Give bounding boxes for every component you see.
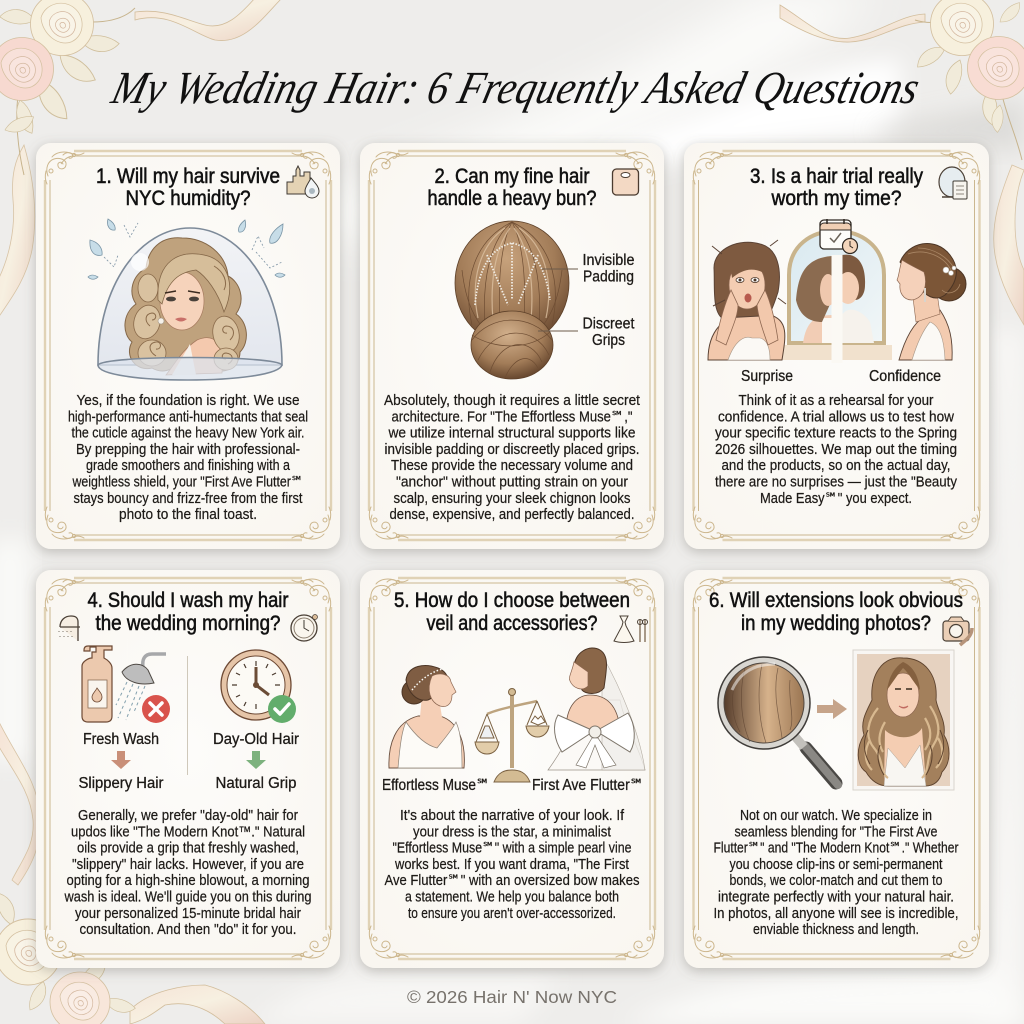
flow: fresh wash to slippery hair: Slippery Hair (78, 775, 164, 792)
divider (186, 656, 188, 775)
card 1 panel (36, 143, 340, 549)
illustration: first ave flutter (548, 648, 645, 770)
bun labels: Padding (583, 268, 634, 286)
card 3 answer text: confidence. A trial allows us to test how (718, 409, 954, 425)
card 2 answer text: "anchor" without putting strain on your (396, 474, 628, 490)
flow: fresh wash to slippery hair (78, 731, 164, 792)
card 2 heading: handle a heavy bun? (428, 187, 596, 210)
card 3 heading: 3. Is a hair trial really (750, 165, 923, 188)
card 4 answer text (64, 808, 311, 938)
card 2 answer text (384, 393, 640, 523)
card 2 answer text: These provide the necessary volume and (391, 458, 633, 474)
icon: mirror and checklist (939, 167, 967, 199)
icon: scale (612, 169, 638, 195)
card 5 answer text: "Effortless Muse℠" with a simple pearl vine (392, 841, 632, 857)
flow: day-old hair to natural grip: Natural Grip (216, 775, 296, 792)
card 2 heading (428, 165, 596, 210)
calendar with clock (820, 219, 858, 254)
card 1 answer text: grade smoothers and finishing with a (86, 458, 291, 474)
card 5 heading: 5. How do I choose between (394, 589, 630, 612)
card 4 answer text: Generally, we prefer "day-old" hair for (78, 808, 298, 824)
card 5 answer text: your dress is the star, a minimalist (413, 824, 611, 840)
elegant woman (897, 243, 966, 360)
icon: small shower (59, 616, 80, 641)
arrow (817, 699, 847, 719)
icon: small stopwatch (291, 614, 318, 641)
flow: day-old hair to natural grip (213, 731, 299, 792)
card 6 answer text: Flutter℠" and "The Modern Knot℠." Whether (714, 841, 959, 857)
illustration: magnifying glass on hair (718, 657, 838, 785)
card 6 answer text: enviable thickness and length. (753, 922, 919, 938)
illustration: balance scales (475, 688, 549, 782)
frazzled woman (708, 240, 786, 360)
mirror (778, 231, 892, 363)
card 6 answer text: seamless blending for "The First Ave (734, 824, 938, 840)
card 3 answer text (715, 393, 958, 507)
card 4 answer text: oils provide a grip that freshly washed, (77, 841, 299, 857)
card 6 heading: in my wedding photos? (741, 612, 931, 635)
card 5 panel: Effortless Muse℠ (382, 777, 490, 794)
icon: dress and accessory (614, 616, 648, 642)
illustration: chignon with hidden padding and grips (455, 221, 635, 379)
card 4 heading (88, 589, 288, 635)
card 6 heading: 6. Will extensions look obvious (709, 589, 963, 612)
card 1 answer text: stays bouncy and frizz-free from the first (74, 491, 302, 507)
card 4 panel (36, 570, 340, 968)
card 5 answer text: a statement. We help you balance both (405, 890, 619, 906)
card 1 answer text: Yes, if the foundation is right. We use (76, 393, 300, 409)
card 1 answer text: By prepping the hair with professional- (76, 442, 300, 458)
card 1 heading: 1. Will my hair survive (96, 165, 280, 188)
card 2 answer text: Absolutely, though it requires a little secret (384, 393, 640, 409)
illustration: fresh wash (82, 646, 170, 723)
card 6 answer text: Not on our watch. We specialize in (740, 808, 932, 824)
card 5 answer text: Ave Flutter℠" with an oversized bow makes (384, 873, 640, 889)
illustration: day-old clock (221, 650, 296, 723)
card 2 answer text: scalp, ensuring your sleek chignon looks (394, 491, 630, 507)
card 3 answer text: Think of it as a rehearsal for your (738, 393, 934, 409)
footer copyright: © 2026 Hair N' Now NYC (407, 987, 617, 1007)
card 4 answer text: your personalized 15-minute bridal hair (75, 906, 301, 922)
bun labels: Invisible (582, 252, 634, 269)
card 5 answer text: to ensure you aren't over-accessorized. (408, 906, 616, 922)
card 3 answer text: 2026 silhouettes. We map out the timing (715, 442, 957, 458)
card 5 answer text: works best. If you want drama, "The First (394, 857, 629, 873)
decoration: top-left florals and ribbon (0, 0, 282, 318)
card 3 answer text: your specific texture reacts to the Spring (715, 426, 957, 442)
card 3 answer text: and the products, so on the actual day, (722, 458, 950, 474)
card 6 panel (684, 570, 989, 968)
illustration: effortless muse (389, 666, 464, 768)
icon: camera with hair strand (943, 617, 972, 645)
bun labels: Discreet (582, 316, 635, 332)
card 6 answer text: bonds, we color-match and cut them to (730, 873, 942, 889)
card 6 answer text (714, 808, 959, 938)
card 4 answer text: wash is ideal. We'll guide you on this during (64, 890, 311, 906)
card 6 answer text: you choose clip-ins or semi-permanent (730, 857, 942, 873)
title: My Wedding Hair: 6 Frequently Asked Questions (106, 63, 925, 114)
card 2 answer text: dense, expensive, and perfectly balanced. (390, 507, 634, 523)
card 6 answer text: In photos, all anyone will see is incredible, (714, 906, 958, 922)
card 1 answer text: weightless shield, your "First Ave Flutter℠ (72, 474, 303, 490)
card 5 answer text (384, 808, 640, 922)
card 4 answer text: "slippery" hair lacks. However, if you are (72, 857, 304, 873)
decoration: bottom-left florals and ribbon (0, 720, 265, 1024)
card 4 heading: the wedding morning? (96, 612, 280, 635)
illustration: hair under a glass dome (88, 219, 285, 380)
card 1 heading: NYC humidity? (126, 187, 250, 210)
illustration: framed photo of long hair (853, 650, 954, 790)
card 6 answer text: integrate perfectly with your natural hair. (718, 890, 954, 906)
card 1 answer text: photo to the final toast. (119, 507, 257, 523)
card 1 answer text: high-performance anti-humectants that seal (68, 409, 308, 425)
card 1 answer text: the cuticle against the heavy New York air. (72, 426, 304, 442)
flow: fresh wash to slippery hair: Fresh Wash (83, 731, 159, 748)
card 6 heading (709, 589, 963, 635)
card 5 answer text: It's about the narrative of your look. If (400, 808, 625, 824)
card 5 panel (360, 570, 664, 968)
card 3 answer text: Made Easy℠" you expect. (760, 491, 912, 507)
card 5 heading: veil and accessories? (426, 612, 598, 635)
card 2 answer text: invisible padding or discreetly placed grips. (384, 442, 640, 458)
card 5 panel: First Ave Flutter℠ (532, 777, 644, 794)
card 3 panel (684, 143, 989, 549)
card 3 answer text: there are no surprises — just the "Beauty (715, 474, 958, 490)
card 1 heading (96, 165, 280, 210)
illustration: surprise vs confidence mirror (708, 219, 966, 385)
card 3 heading (750, 165, 923, 210)
card 1 answer text (68, 393, 308, 523)
card 4 answer text: updos like "The Modern Knot™." Natural (71, 824, 305, 840)
card 3 heading: worth my time? (771, 187, 902, 210)
flow: day-old hair to natural grip: Day-Old Hair (213, 731, 299, 748)
card 2 answer text: we utilize internal structural supports like (388, 426, 636, 442)
card 4 answer text: opting for a high-shine blowout, a morning (66, 873, 310, 889)
bun labels: Grips (592, 332, 625, 349)
card 4 answer text: consultation. And then "do" it for you. (80, 922, 296, 938)
icon: city skyline and drop (287, 166, 319, 198)
card 2 panel (360, 143, 664, 549)
illustration: surprise vs confidence mirror: Surprise (741, 368, 793, 385)
card 2 answer text: architecture. For "The Effortless Muse℠," (392, 409, 632, 425)
decoration: top-right florals and ribbon (780, 0, 1024, 325)
card 4 heading: 4. Should I wash my hair (88, 589, 288, 612)
card 2 heading: 2. Can my fine hair (434, 165, 590, 188)
illustration: surprise vs confidence mirror: Confidence (869, 368, 941, 385)
card 5 heading (394, 589, 630, 635)
bun labels (582, 252, 635, 349)
